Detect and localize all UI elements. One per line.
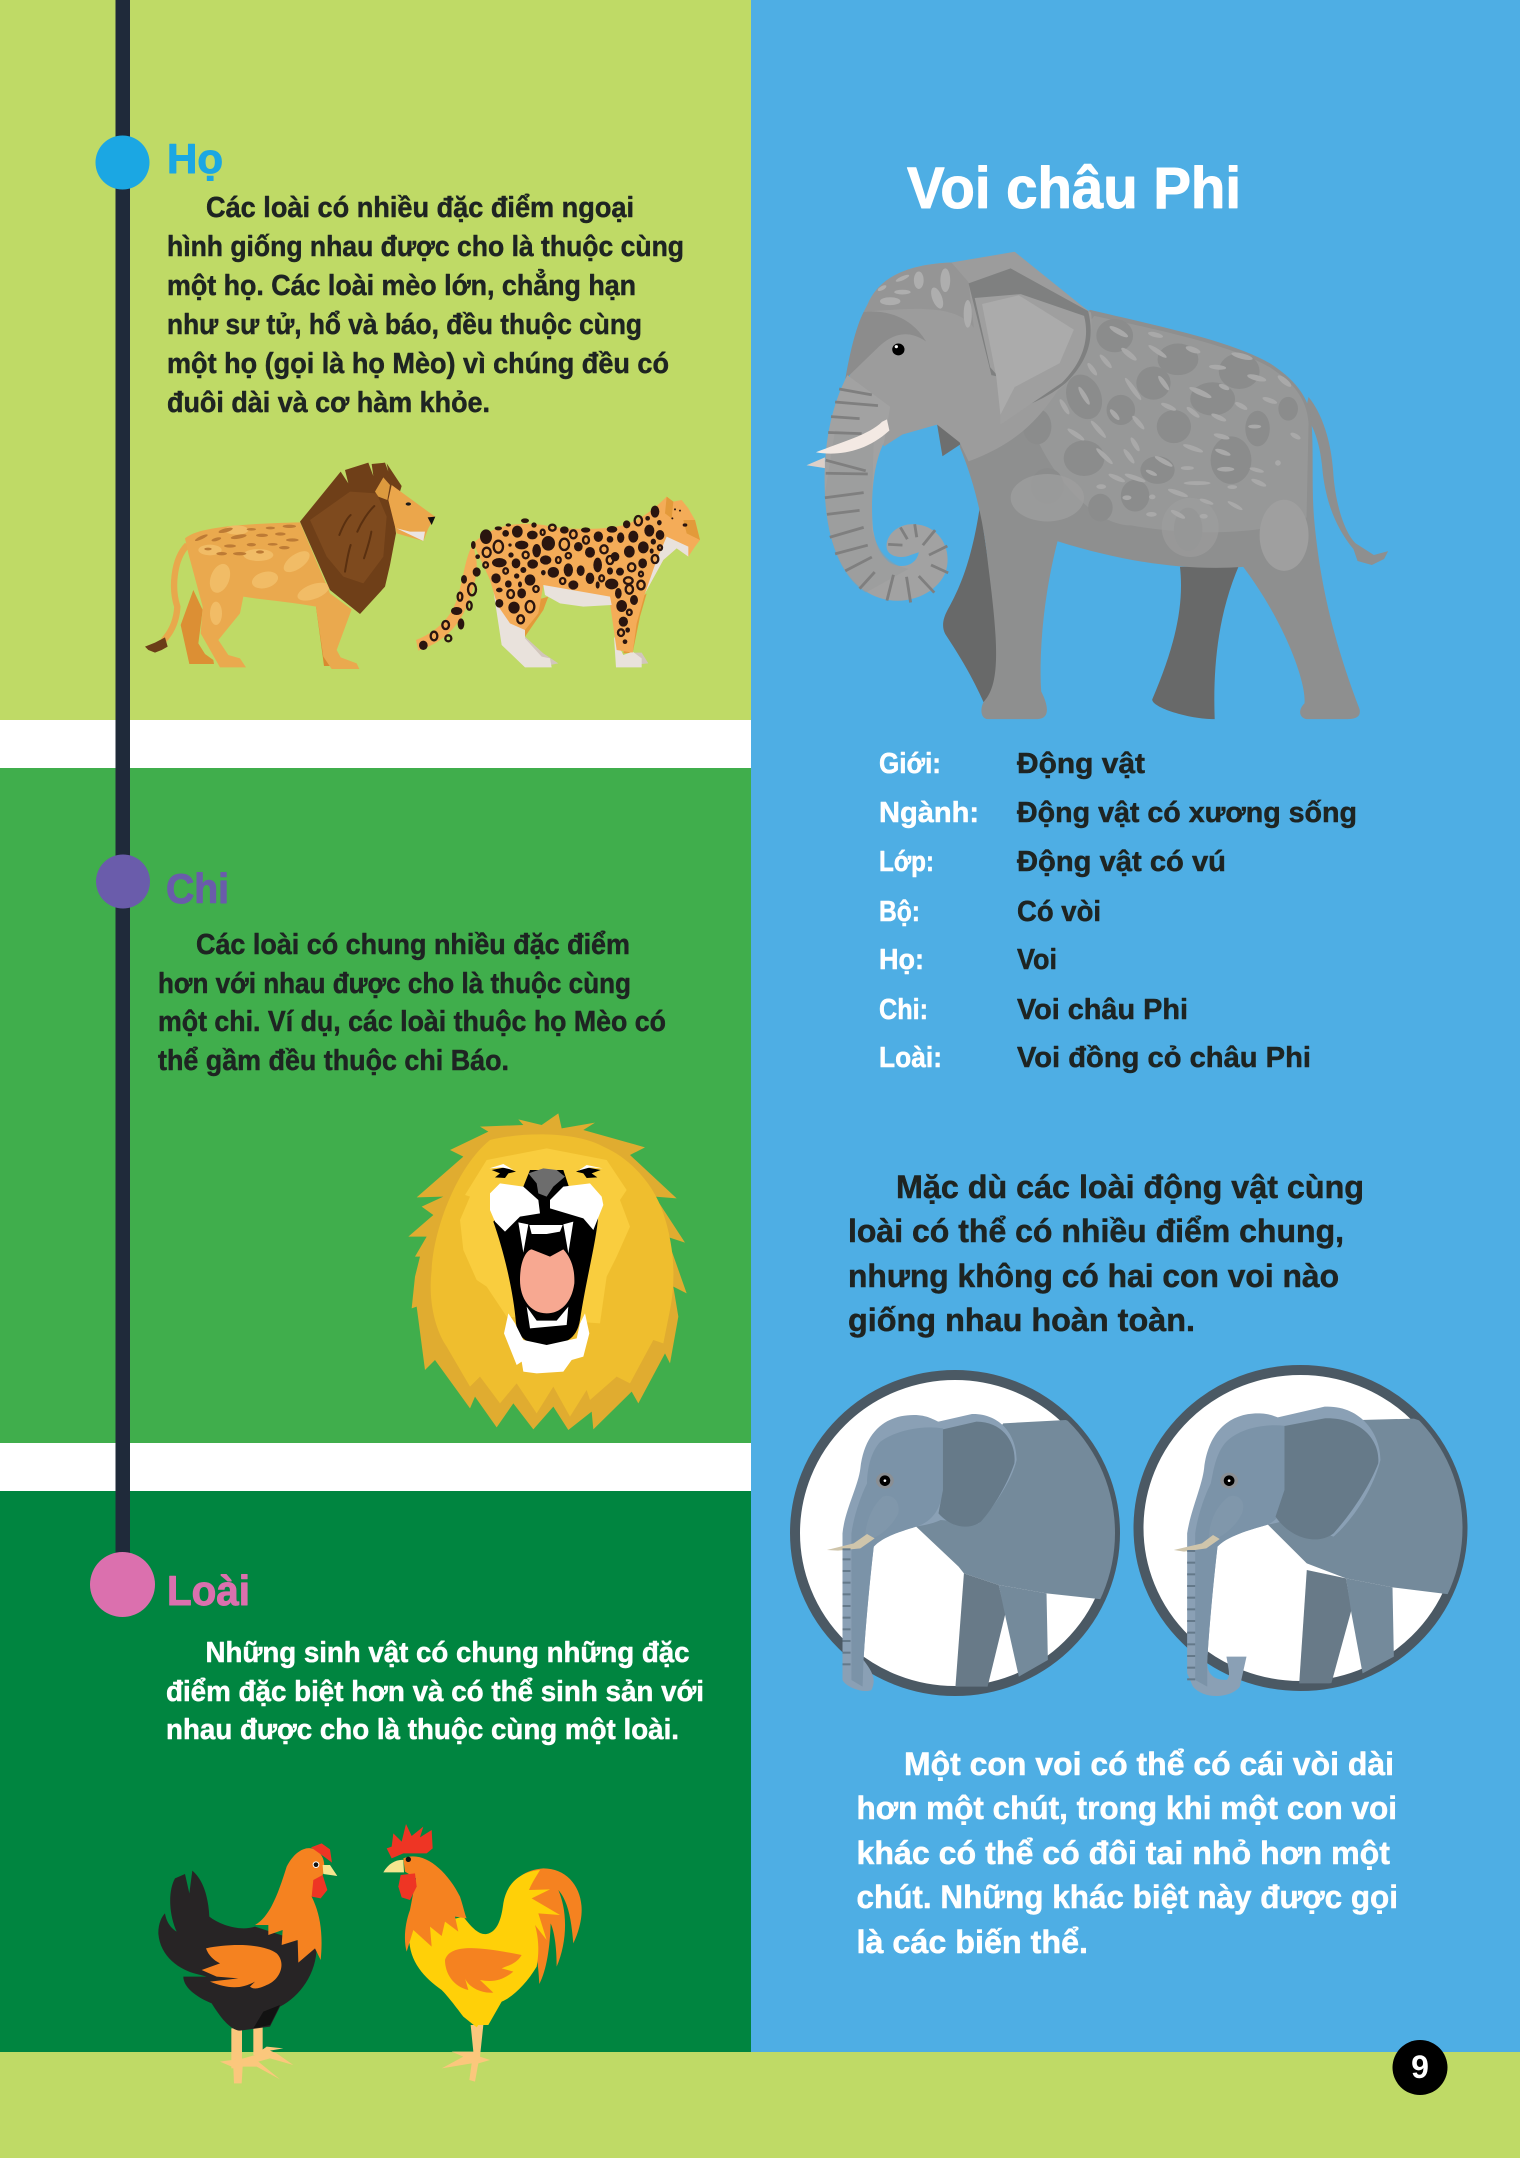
panel: Loài background (0, 1491, 751, 2052)
text block: variation paragraph: là các biến thể. (856, 1924, 1088, 1960)
illustration: African elephant (807, 252, 1388, 719)
table labels (879, 748, 979, 1074)
text block: Chi description: Các loài có chung nhiều đặc điểm (196, 929, 630, 961)
table labels: Ngành: (879, 797, 979, 829)
rooster (383, 1824, 582, 2082)
heading: Chi: Chi (166, 865, 229, 912)
text block: similarity paragraph: Mặc dù các loài động vật cùng (896, 1169, 1364, 1205)
text block: Loài description: nhau được cho là thuộc cùng một loài. (166, 1714, 679, 1746)
text block: Họ description: đuôi dài và cơ hàm khỏe. (167, 387, 490, 419)
text block: similarity paragraph: loài có thể có nhiều điểm chung, (848, 1213, 1344, 1249)
text block: similarity paragraph (848, 1169, 1364, 1338)
table values: Voi (1017, 944, 1057, 976)
text block: variation paragraph: chút. Những khác biệt này được gọi (856, 1879, 1398, 1915)
illustration: elephant portrait with larger ear and hooked trunk (1138, 1370, 1468, 1696)
illustration: roaring lion head (408, 1113, 687, 1430)
hen (158, 1843, 337, 2083)
marker: Loài (90, 1552, 155, 1617)
text block: Loài description: Những sinh vật có chung những đặc (206, 1637, 690, 1669)
heading: Họ: Họ (167, 135, 223, 182)
text block: Chi description: hơn với nhau được cho là thuộc cùng (158, 968, 631, 1000)
text block: variation paragraph: hơn một chút, trong khi một con voi (856, 1790, 1397, 1826)
timeline bar (116, 0, 130, 1560)
table values: Động vật có xương sống (1017, 797, 1357, 829)
text block: Chi description: thể gầm đều thuộc chi Báo. (158, 1045, 509, 1077)
text block: variation paragraph: khác có thể có đôi tai nhỏ hơn một (856, 1835, 1390, 1871)
table labels: Loài: (879, 1042, 942, 1074)
title: Voi châu Phi: Voi châu Phi (907, 156, 1241, 221)
text block: similarity paragraph: giống nhau hoàn toàn. (848, 1302, 1195, 1338)
page number badge: 9 (1411, 2049, 1429, 2085)
panel: Voi châu Phi background (751, 0, 1520, 2052)
table values: Voi đồng cỏ châu Phi (1017, 1042, 1311, 1074)
table labels: Bộ: (879, 896, 920, 928)
table labels: Giới: (879, 748, 941, 780)
table values (1017, 748, 1357, 1074)
text block: Chi description (158, 929, 666, 1077)
taxonomy table (879, 748, 1357, 1074)
text block: Họ description: một họ. Các loài mèo lớn, chẳng hạn (167, 268, 636, 302)
text block: similarity paragraph: nhưng không có hai con voi nào (848, 1258, 1339, 1294)
table labels: Họ: (879, 944, 924, 976)
text block: Họ description: Các loài có nhiều đặc điểm ngoại (206, 192, 634, 224)
table values: Có vòi (1017, 896, 1101, 928)
illustration: hen and rooster (158, 1824, 582, 2083)
table values: Động vật (1017, 748, 1145, 780)
text block: variation paragraph (856, 1746, 1398, 1960)
heading: Loài: Loài (167, 1567, 250, 1614)
table values: Voi châu Phi (1017, 994, 1188, 1026)
panel: Chi background (0, 768, 751, 1443)
page number badge (1392, 2040, 1448, 2095)
text block: Chi description: một chi. Ví dụ, các loài thuộc họ Mèo có (158, 1006, 666, 1038)
panel: bottom strip (0, 2052, 1520, 2158)
marker: Chi (96, 854, 150, 908)
table labels: Lớp: (879, 846, 934, 878)
panel: Họ background (0, 0, 751, 720)
table values: Động vật có vú (1017, 846, 1226, 878)
text block: Loài description (166, 1637, 704, 1746)
illustration: leopard side view (416, 497, 700, 667)
illustration: lion side view (145, 463, 435, 669)
text block: variation paragraph: Một con voi có thể có cái vòi dài (904, 1746, 1394, 1782)
illustration: elephant portrait with long trunk (795, 1375, 1124, 1691)
text block: Loài description: điểm đặc biệt hơn và có thể sinh sản với (166, 1676, 704, 1708)
text block: Họ description: như sư tử, hổ và báo, đều thuộc cùng (167, 309, 642, 341)
text block: Họ description (167, 192, 684, 419)
marker: Họ (96, 136, 150, 190)
text block: Họ description: một họ (gọi là họ Mèo) vì chúng đều có (167, 348, 669, 380)
text block: Họ description: hình giống nhau được cho là thuộc cùng (167, 231, 684, 263)
table labels: Chi: (879, 994, 928, 1026)
